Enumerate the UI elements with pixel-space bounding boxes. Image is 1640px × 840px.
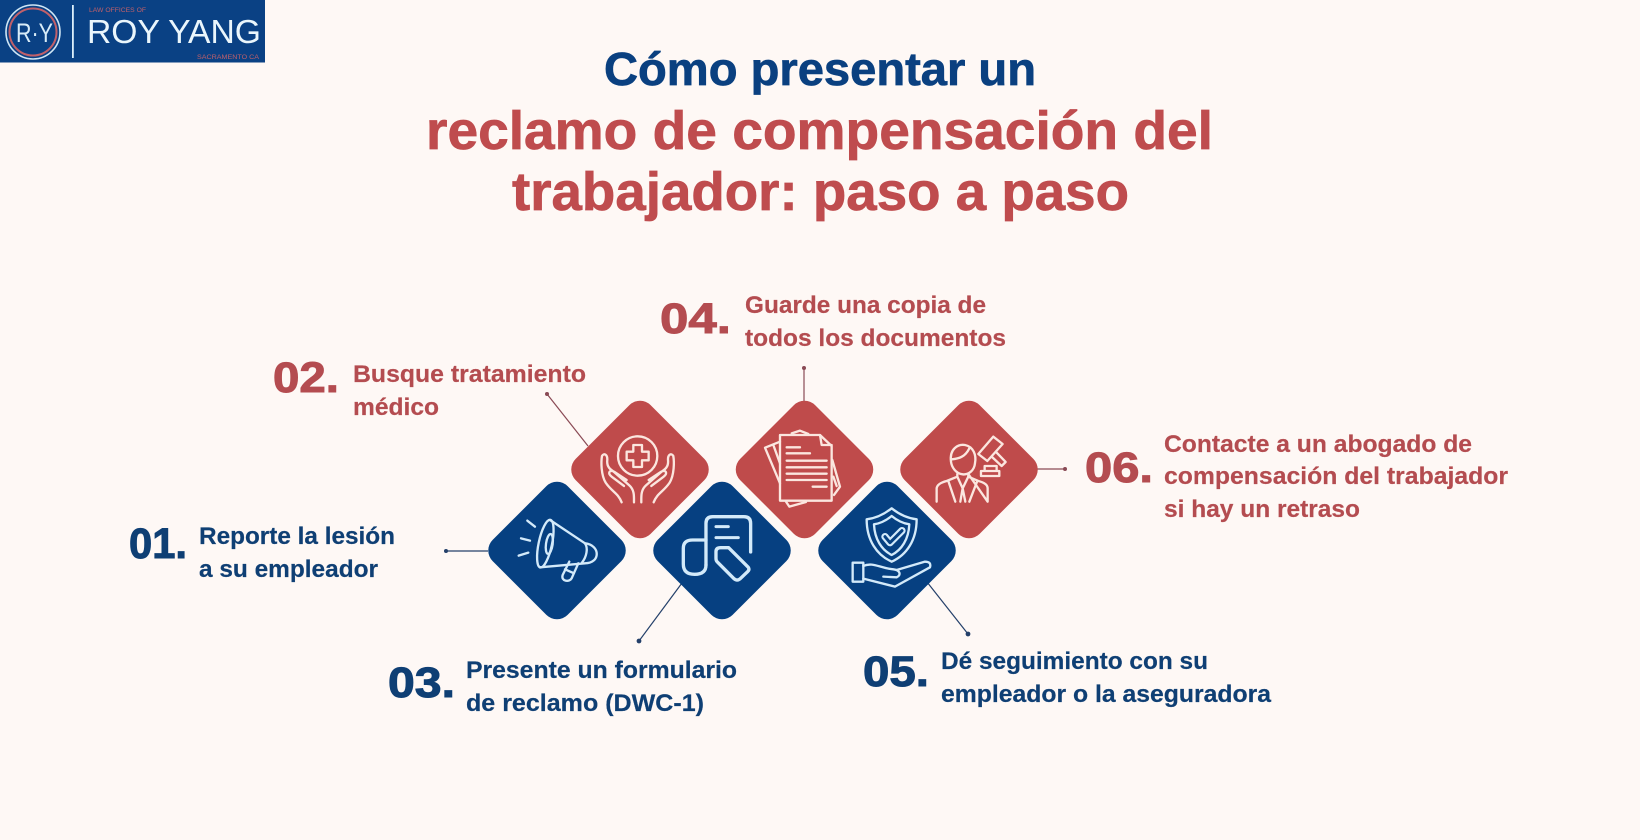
step 2 label: 02. [273,354,339,402]
step 4 label: 04. [660,295,731,343]
step 2 label: médico [353,394,439,421]
step 4 label [660,292,1006,352]
connector: step 3 [637,583,682,643]
diamond: step 1 [482,476,632,625]
title: Cómo presentar un [604,43,1036,95]
logo: Law Offices of Roy Yang: LAW OFFICES OF [89,7,146,14]
step 5 label: Dé seguimiento con su [941,648,1208,675]
step 1 label [129,520,395,583]
logo: Law Offices of Roy Yang: SACRAMENTO CA [197,54,260,61]
icon: megaphone [519,518,597,581]
step 2 label [273,354,586,421]
step 5 label: empleador o la aseguradora [941,681,1272,708]
connector: step 5 [927,582,970,636]
step 4 label: Guarde una copia de [745,292,986,319]
icon: stack of documents [765,431,840,507]
diamond: step 6 [894,395,1044,544]
icon: document and tag [683,517,751,580]
connector: step 6 [1037,467,1067,471]
step 6 label: 06. [1085,444,1153,492]
step 6 label: Contacte a un abogado de [1164,431,1472,458]
connector: step 1 [444,549,488,553]
logo: Law Offices of Roy Yang: ROY YANG [87,13,261,50]
title: reclamo de compensación del [426,101,1213,161]
step 2 label: Busque tratamiento [353,361,586,388]
step 3 label: de reclamo (DWC-1) [466,690,704,717]
step 3 label [388,657,737,717]
step 6 label: si hay un retraso [1164,496,1360,523]
icon: shield with check on open hand [853,508,930,587]
title: trabajador: paso a paso [512,162,1129,222]
icon: lawyer with gavel [937,437,1006,502]
step 5 label [863,648,1272,708]
logo: Law Offices of Roy Yang [0,0,265,62]
diamond: step 3 [647,476,797,625]
logo: Law Offices of Roy Yang: R·Y [16,18,53,48]
step 3 label: 03. [388,659,455,707]
diamond: step 2 [565,395,715,544]
step 5 label: 05. [863,648,929,696]
step 1 label: Reporte la lesión [199,523,395,550]
title [426,43,1213,222]
diamond: step 4 [730,395,879,544]
diamond: step 5 [812,476,962,625]
icon: hands holding medical cross [601,436,674,502]
step 4 label: todos los documentos [745,325,1006,352]
step 1 label: a su empleador [199,556,378,583]
connector: step 4 [802,366,806,402]
step 3 label: Presente un formulario [466,657,737,684]
step 1 label: 01. [129,520,187,568]
step 6 label [1085,431,1508,523]
step 6 label: compensación del trabajador [1164,463,1508,490]
connector: step 2 [545,392,588,446]
